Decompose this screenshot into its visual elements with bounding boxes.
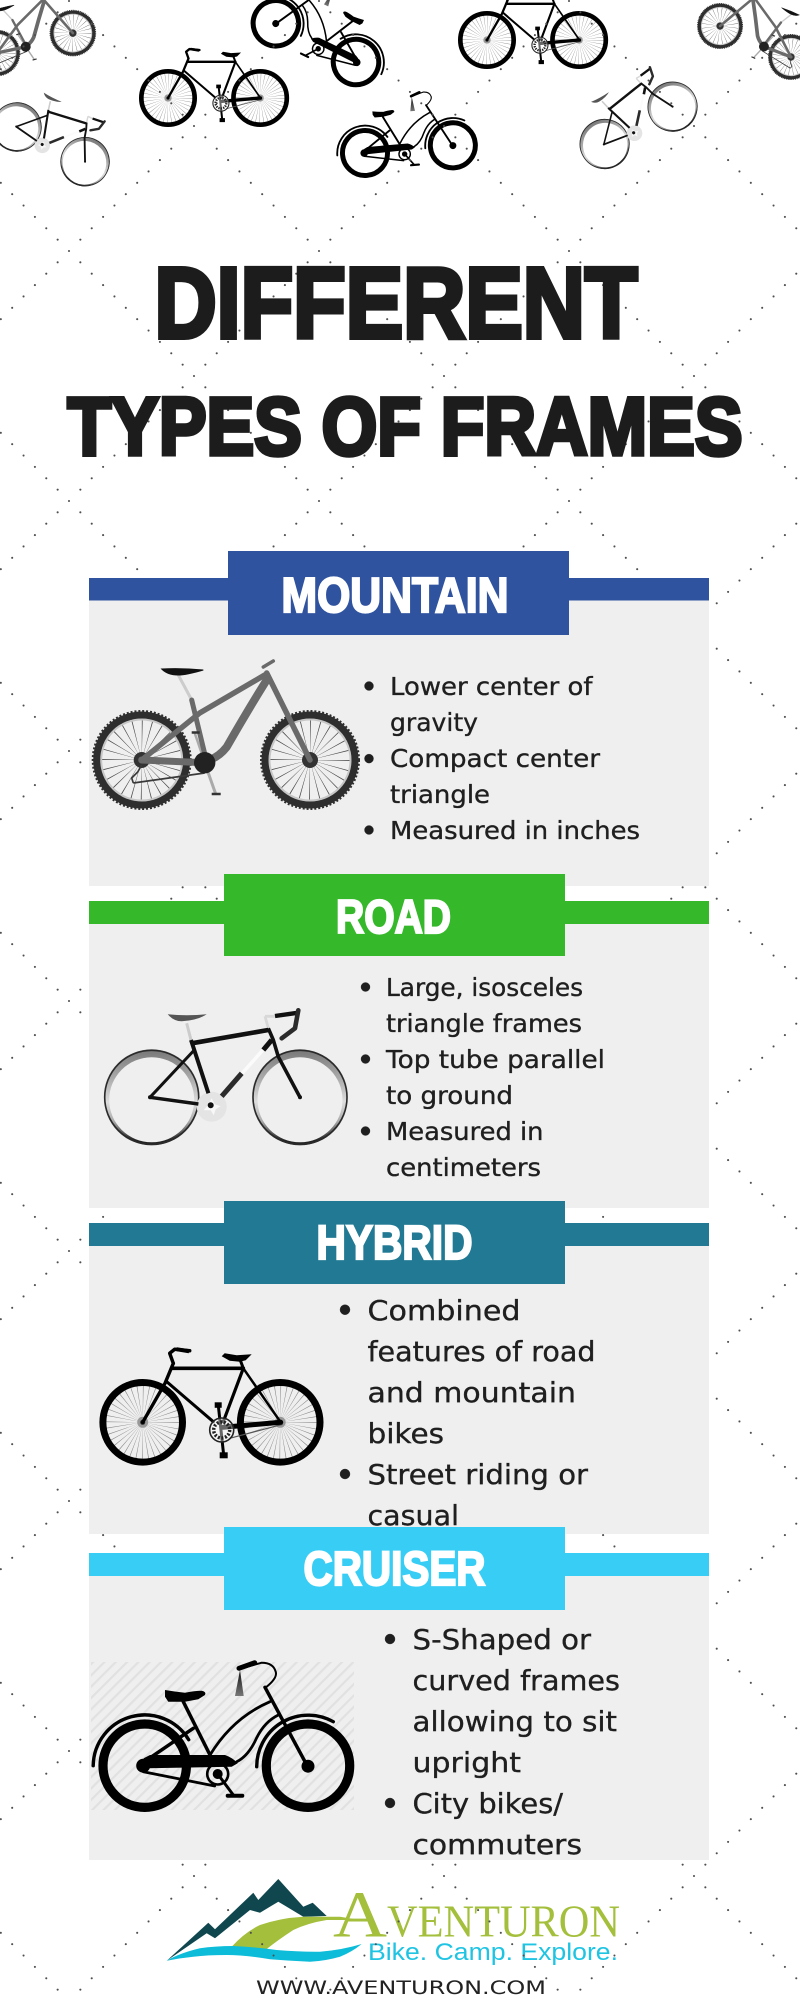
hybrid header band bbox=[89, 1223, 709, 1246]
road bullet list: Measured in bbox=[386, 1117, 544, 1146]
cruiser bullet list: commuters bbox=[412, 1828, 582, 1861]
mountain bullet list bbox=[364, 672, 640, 845]
icon: hybrid bike bbox=[103, 1347, 320, 1462]
cruiser bullet list: curved frames bbox=[412, 1664, 620, 1697]
mountain header band bbox=[89, 578, 709, 600]
road header tab bbox=[224, 874, 565, 956]
road heading: ROAD bbox=[336, 891, 451, 944]
hybrid bullet list: Combined bbox=[368, 1294, 520, 1327]
mountain bullet list: gravity bbox=[390, 708, 478, 737]
icon: cruiser bike bbox=[91, 1662, 354, 1810]
hybrid bullet list: Street riding or bbox=[368, 1458, 589, 1491]
logo wordmark: A bbox=[333, 1879, 387, 1952]
cruiser bullet list bbox=[385, 1623, 620, 1861]
hybrid bullet list bbox=[340, 1294, 596, 1532]
website url: WWW.AVENTURON.COM bbox=[256, 1978, 546, 1999]
road bullet list: Top tube parallel bbox=[385, 1045, 605, 1074]
panel: road bbox=[89, 874, 709, 1208]
logo bbox=[167, 1879, 620, 1999]
logo mountains bbox=[167, 1879, 327, 1961]
road bullet list: triangle frames bbox=[386, 1009, 582, 1038]
hybrid bullet list: casual bbox=[368, 1499, 459, 1532]
logo wordmark bbox=[333, 1879, 620, 1952]
cruiser bullet list: S-Shaped or bbox=[412, 1623, 592, 1656]
road bullet list: to ground bbox=[386, 1081, 513, 1110]
logo tagline: Bike. Camp. Explore. bbox=[368, 1939, 618, 1966]
icon: mountain bike bbox=[93, 661, 359, 809]
mountain heading: MOUNTAIN bbox=[282, 568, 508, 623]
hybrid bullet list: bikes bbox=[368, 1417, 444, 1450]
icon: road bike bbox=[104, 1010, 348, 1145]
cruiser heading: CRUISER bbox=[304, 1543, 486, 1596]
panel: hybrid bbox=[89, 1201, 709, 1534]
road bullet list bbox=[361, 973, 605, 1182]
cruiser header band bbox=[89, 1553, 709, 1576]
hybrid bullet list: and mountain bbox=[368, 1376, 576, 1409]
hybrid heading: HYBRID bbox=[316, 1217, 472, 1270]
mountain bullet list: Measured in inches bbox=[390, 816, 640, 845]
road header band bbox=[89, 901, 709, 924]
decorative bicycles at top bbox=[0, 0, 800, 195]
logo green swoosh bbox=[232, 1917, 360, 1949]
cruiser bullet list: allowing to sit bbox=[412, 1705, 617, 1738]
title bbox=[68, 248, 742, 472]
mountain bullet list: Lower center of bbox=[390, 672, 594, 701]
road bullet list: centimeters bbox=[386, 1153, 541, 1182]
panel: mountain bbox=[89, 551, 709, 886]
road bullet list: Large, isosceles bbox=[386, 973, 583, 1002]
title: DIFFERENT bbox=[154, 248, 638, 360]
cruiser header tab bbox=[224, 1527, 565, 1610]
logo blue swoosh bbox=[167, 1944, 362, 1962]
logo wordmark: VENTURON bbox=[387, 1896, 620, 1947]
mountain bullet list: Compact center bbox=[390, 744, 601, 773]
panel: cruiser bbox=[89, 1527, 709, 1861]
cruiser bullet list: upright bbox=[412, 1746, 521, 1779]
cruiser bullet list: City bikes/ bbox=[412, 1787, 564, 1820]
hybrid header tab bbox=[224, 1201, 565, 1284]
mountain header tab bbox=[228, 551, 569, 635]
hybrid bullet list: features of road bbox=[368, 1335, 596, 1368]
mountain bullet list: triangle bbox=[390, 780, 490, 809]
